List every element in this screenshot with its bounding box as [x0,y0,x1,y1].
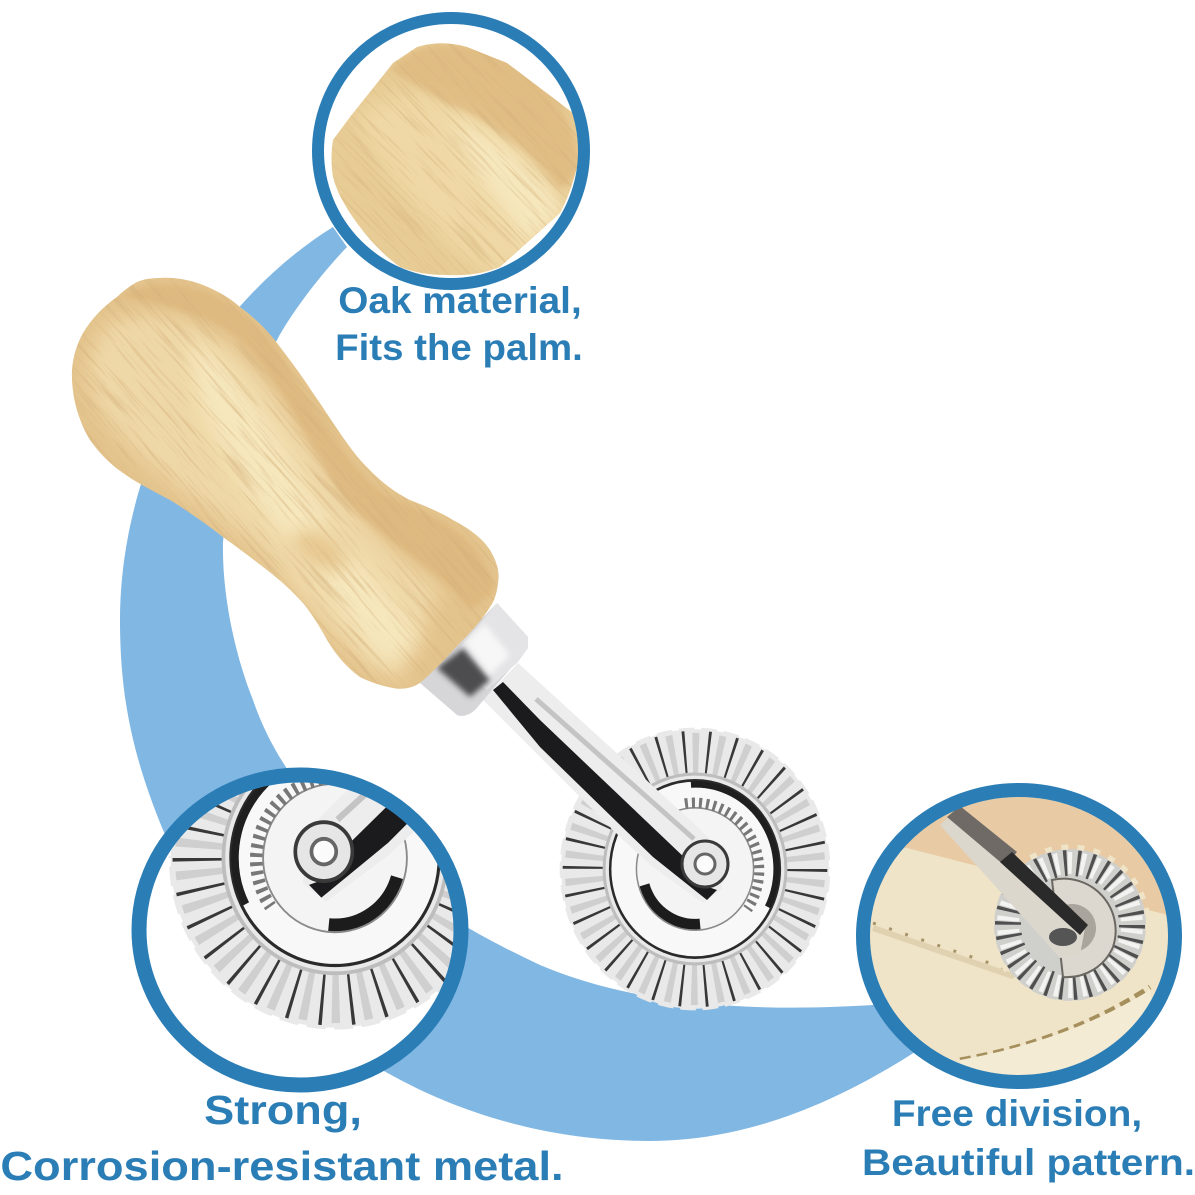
small wheel on dough [992,847,1148,1003]
caption: strong metal: Strong, [204,1088,362,1134]
caption: oak material: Fits the palm. [335,327,583,369]
inset: wooden handle detail [312,12,590,290]
caption: free division [862,1094,1195,1184]
caption: oak material [335,280,583,369]
caption: free division: Beautiful pattern. [862,1143,1195,1184]
inset: cutting dough [860,780,1190,1090]
caption: free division: Free division, [892,1094,1142,1135]
wooden handle [72,278,499,689]
caption: strong metal [0,1088,564,1189]
pastry wheel and shaft [483,663,830,1010]
metal ferrule [420,603,528,716]
caption: strong metal: Corrosion-resistant metal. [0,1144,564,1189]
inset: metal wheel close-up [132,768,468,1092]
caption: oak material: Oak material, [338,280,582,322]
blue crescent [120,227,915,1141]
